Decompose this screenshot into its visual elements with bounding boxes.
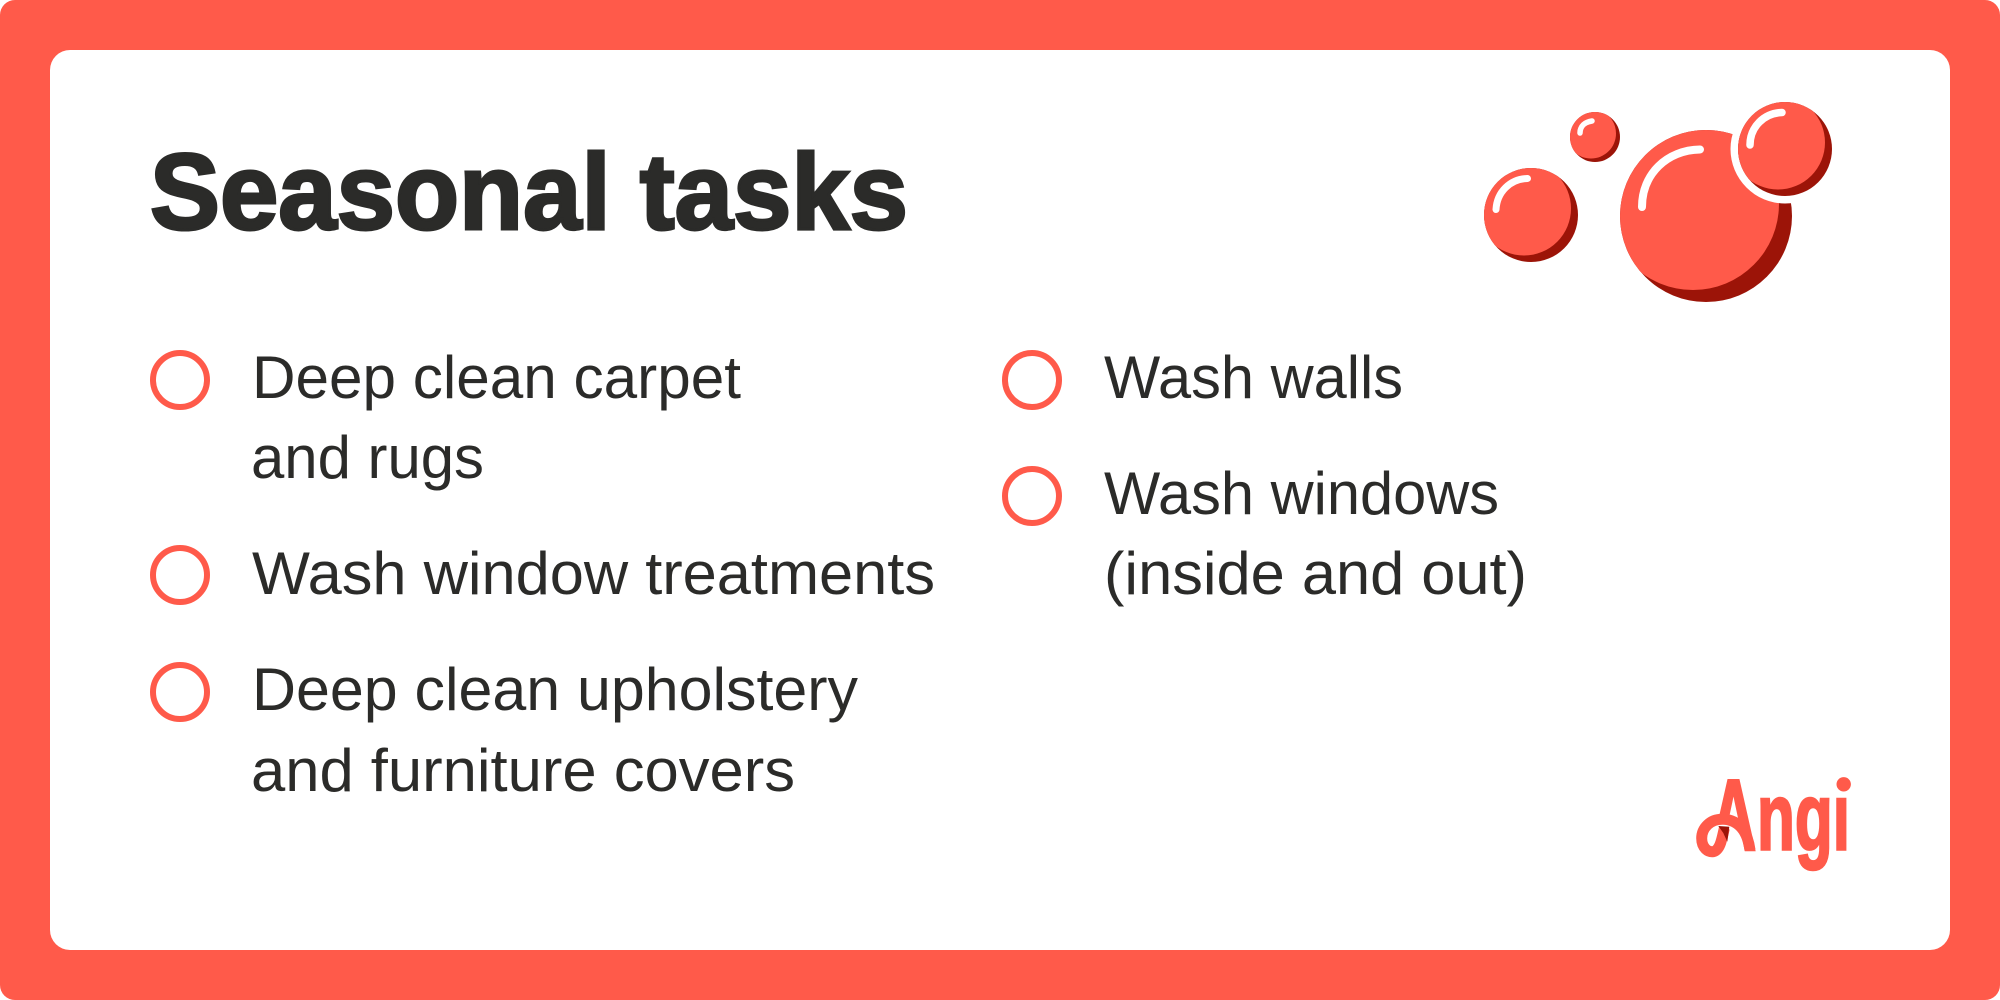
- logo: Angi: A: [1711, 760, 1756, 872]
- icon: left bubble: [1484, 168, 1578, 262]
- logo: Angi: ngi: [1757, 764, 1850, 870]
- checklist item: deep clean upholstery: and furniture covers: [251, 737, 795, 804]
- checklist item: wash windows: [1005, 460, 1527, 607]
- title: Seasonal tasks: [150, 131, 908, 252]
- icon: top right bubble: [1730, 102, 1832, 204]
- checklist item: deep clean upholstery: Deep clean upholstery: [252, 656, 858, 723]
- icon: small bubble: [1570, 112, 1620, 162]
- icon: large bubble: [1620, 130, 1792, 302]
- checklist item: deep clean carpet: Deep clean carpet: [252, 344, 741, 411]
- checklist item: wash windows: Wash windows: [1104, 460, 1499, 527]
- checklist item: deep clean carpet: and rugs: [251, 424, 484, 491]
- logo: Angi: [1696, 777, 1851, 872]
- checklist item: wash walls: Wash walls: [1104, 344, 1403, 411]
- checklist item: deep clean carpet: [153, 344, 741, 491]
- checklist item: wash windows: (inside and out): [1104, 540, 1527, 607]
- checklist item: wash window treatments: Wash window treatments: [252, 540, 935, 607]
- checklist item: deep clean upholstery: [153, 656, 858, 804]
- icon: soap bubbles: [1477, 94, 1840, 302]
